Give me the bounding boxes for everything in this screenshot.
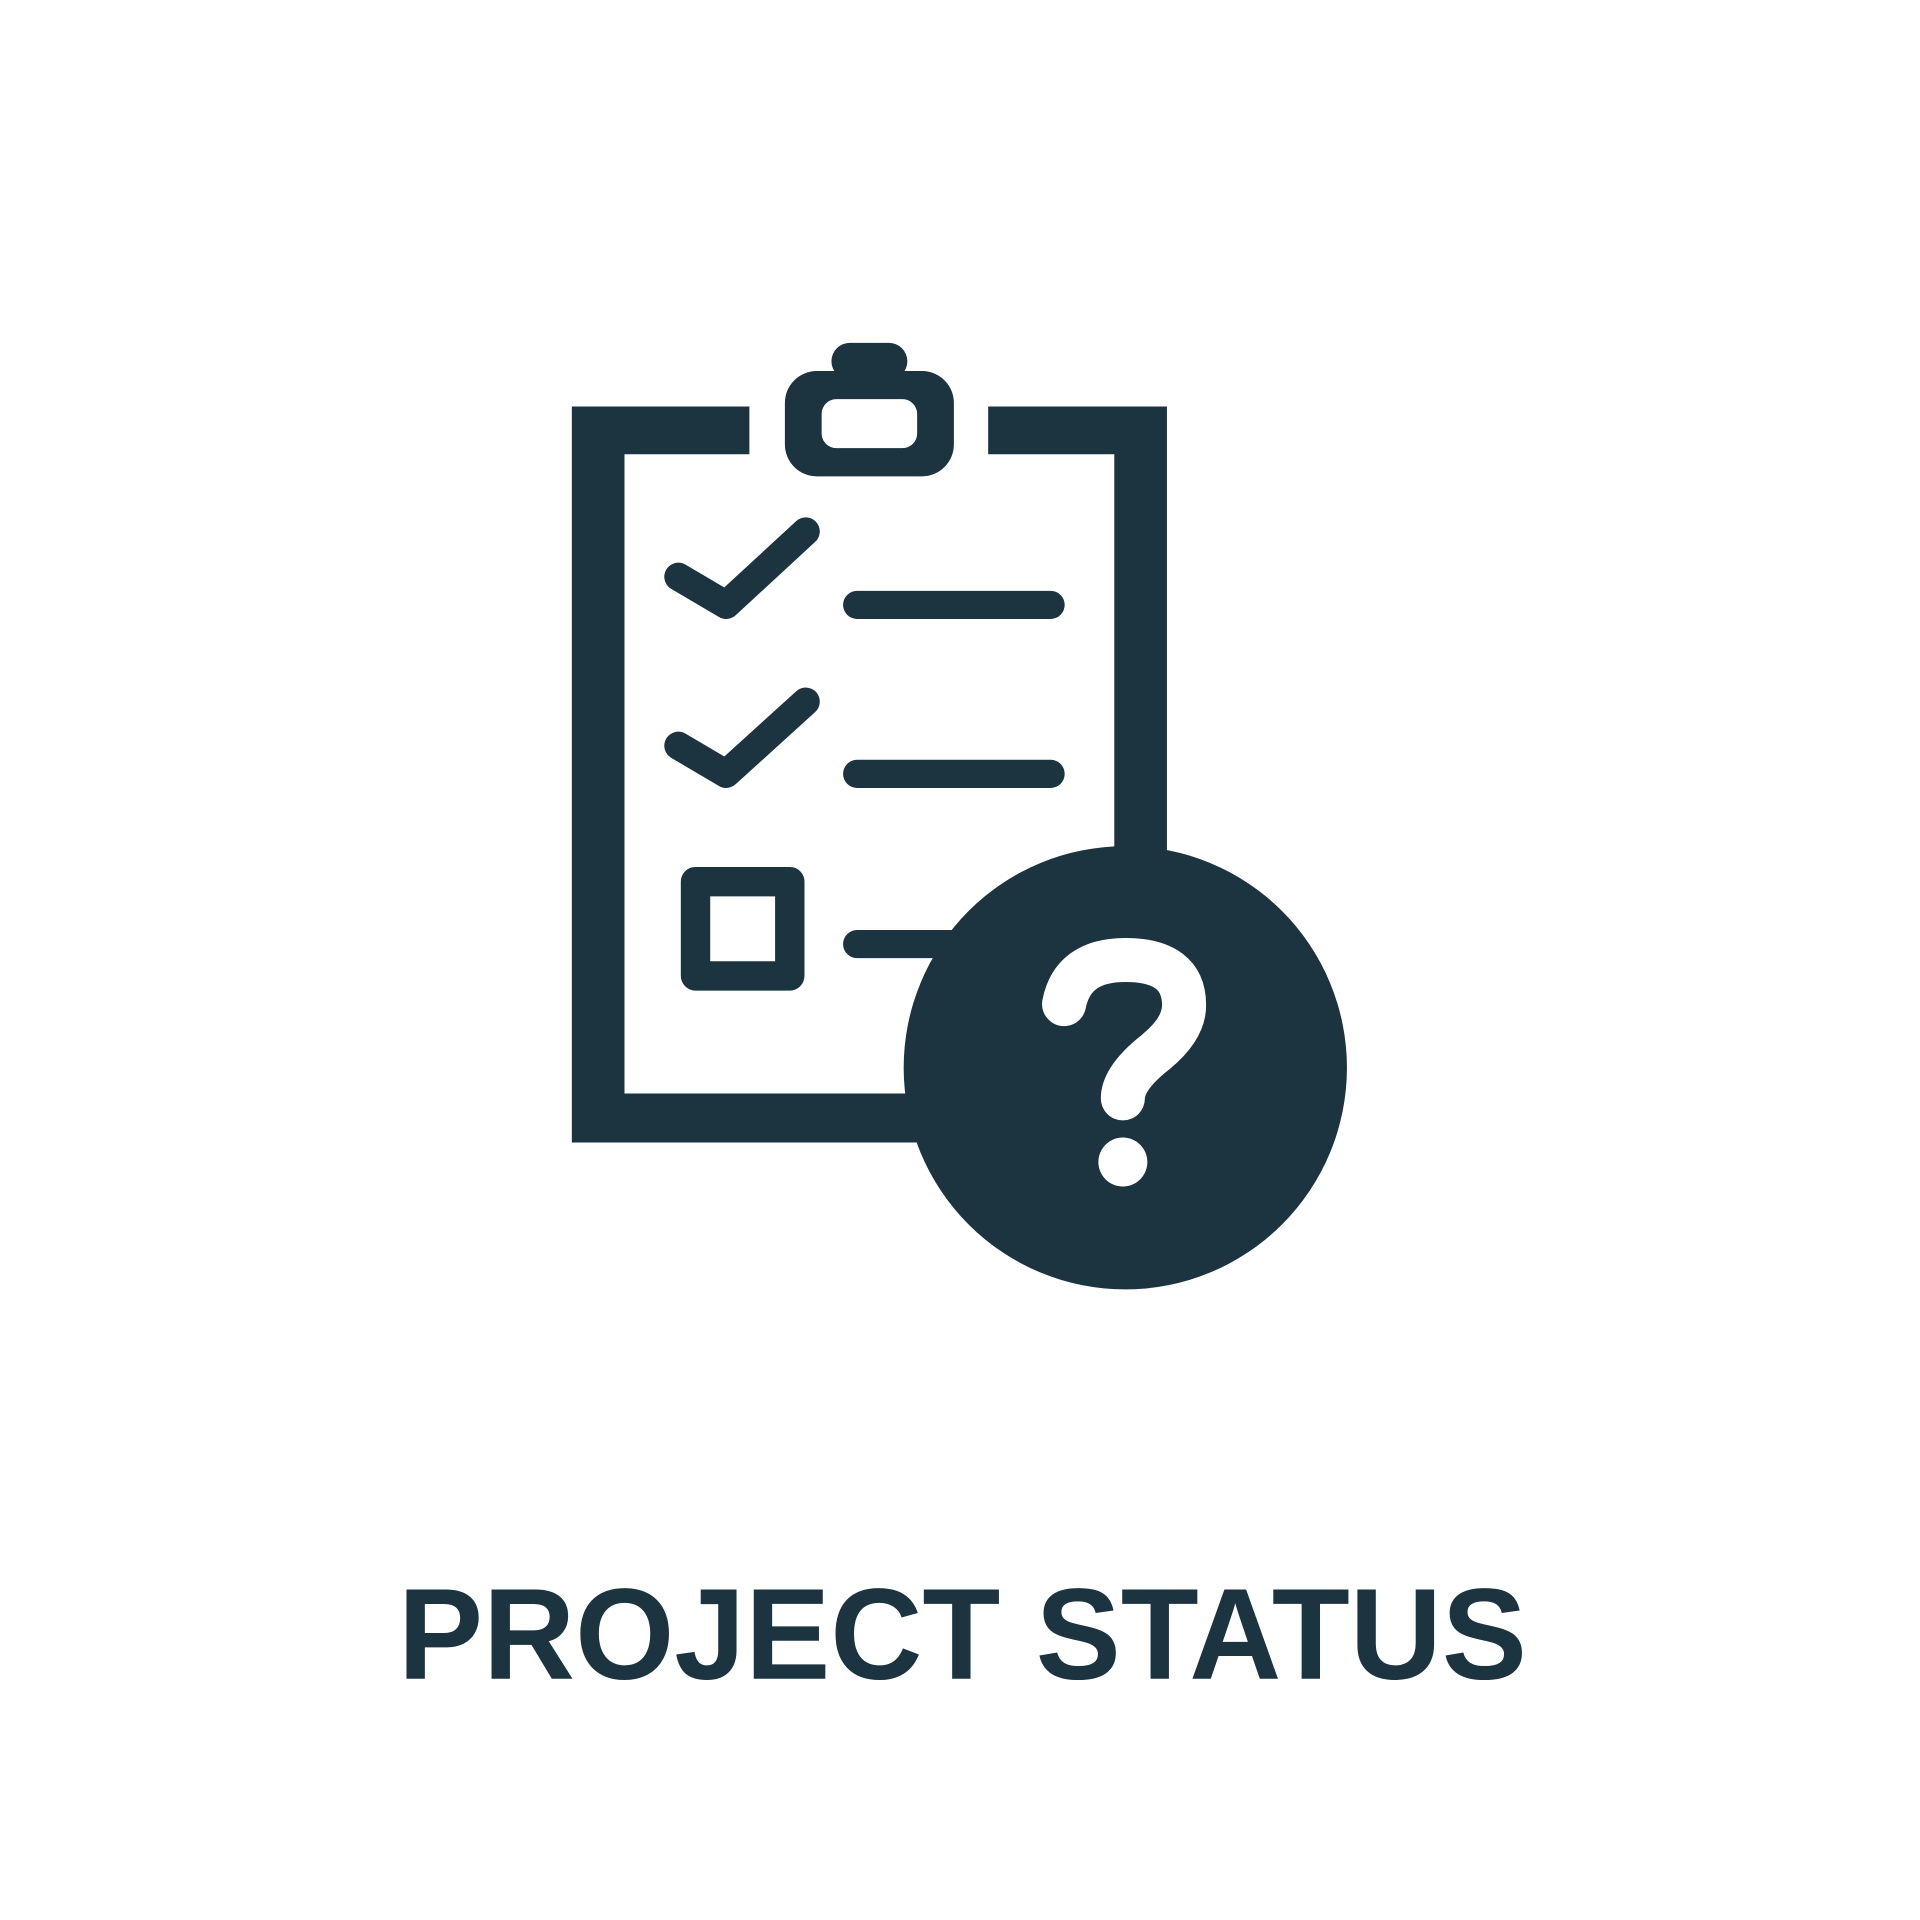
title: PROJECT STATUS: [398, 1562, 1527, 1707]
icon: question mark: [1064, 960, 1184, 1187]
clip: [785, 343, 954, 476]
checkmarks: [678, 531, 1051, 944]
question circle: [904, 846, 1347, 1289]
icon: clipboard with question mark: [572, 343, 1347, 1289]
clipboard frame: [572, 407, 1167, 1142]
empty checkbox: [681, 867, 804, 991]
